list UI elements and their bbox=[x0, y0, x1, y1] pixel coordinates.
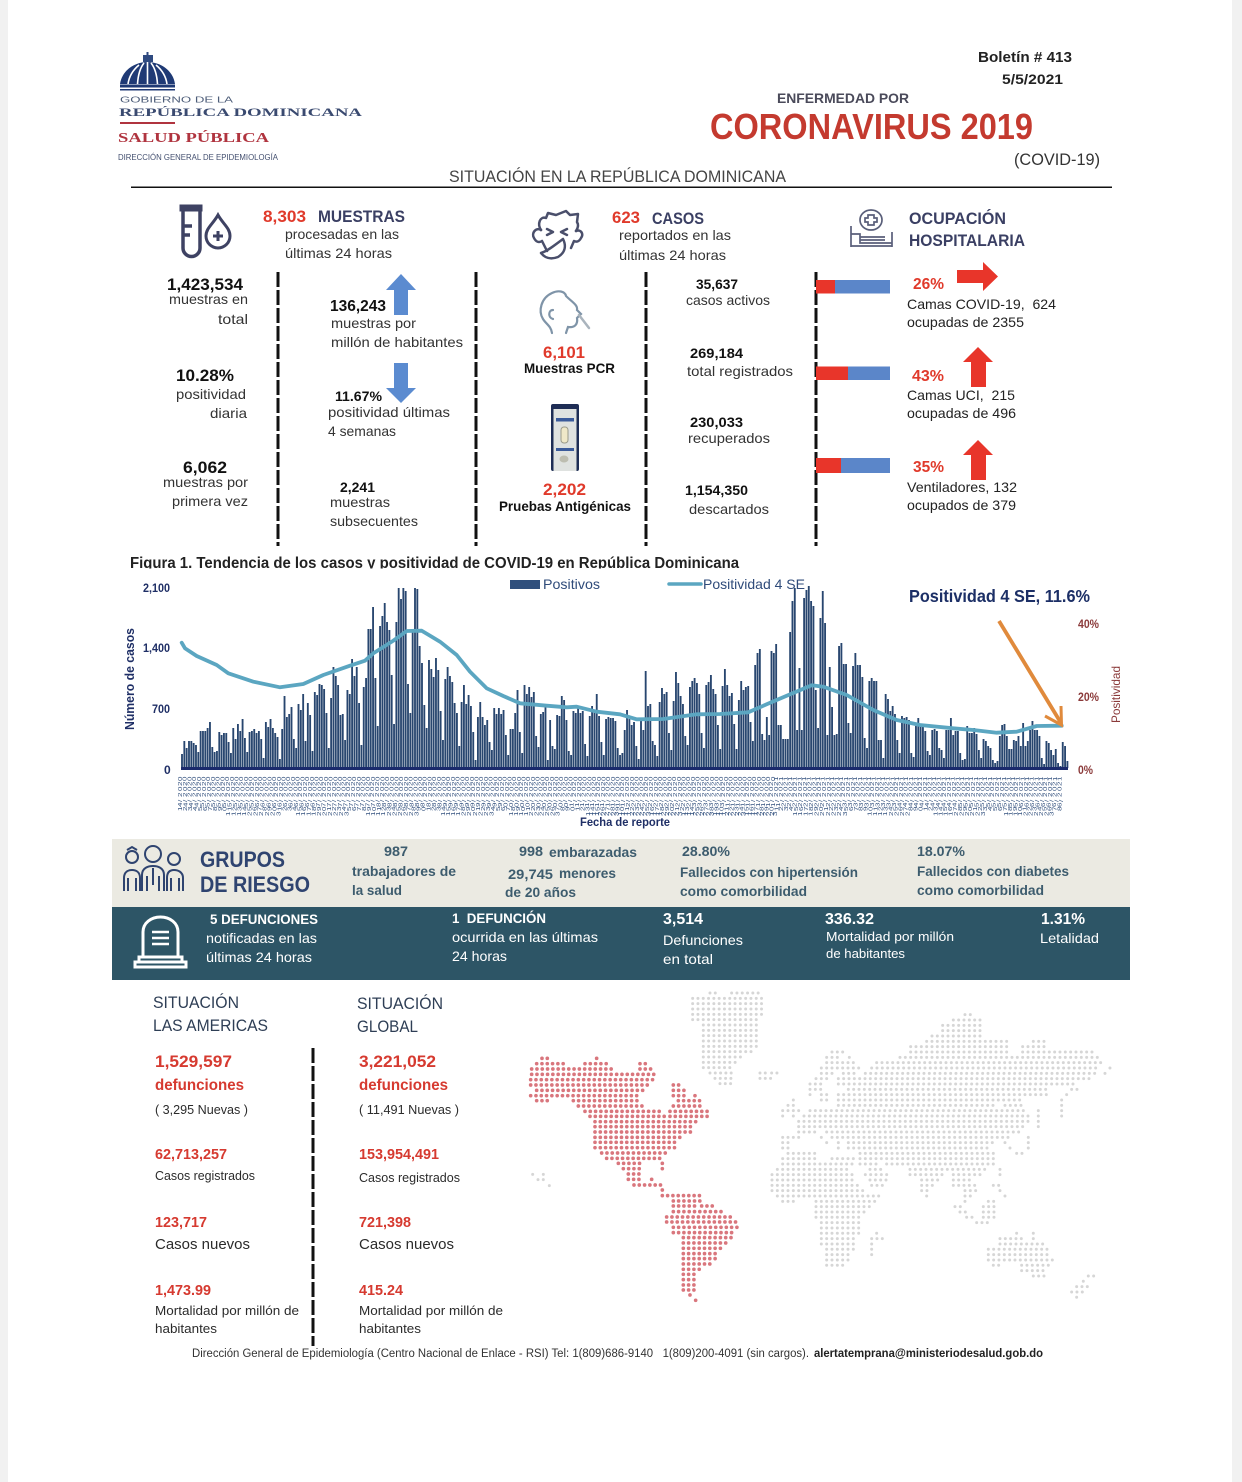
x axis date labels: 1111222223 bbox=[366, 811, 420, 816]
map: Americas in red bbox=[531, 1058, 740, 1300]
icon: test tube and blood drop bbox=[180, 205, 230, 256]
panel: situación Las Américas: ( 3,295 Nuevas ) bbox=[155, 1102, 248, 1117]
panel: defunciones: 336.32 bbox=[825, 911, 874, 928]
panel: defunciones: Letalidad bbox=[1040, 930, 1099, 946]
panel: ocupación details: 26% bbox=[913, 276, 944, 293]
panel: situación Las Américas: 1,529,597 bbox=[155, 1052, 232, 1071]
panel: pruebas antigénicas: Pruebas Antigénicas bbox=[499, 498, 631, 514]
arrow: right bbox=[957, 262, 998, 291]
logo: Gobierno de la República Dominicana, Salud Pública: REPÚBLICA DOMINICANA bbox=[119, 105, 363, 119]
y axis labels: 2,100 bbox=[143, 581, 170, 595]
icon: antigen test cassette bbox=[551, 404, 579, 471]
panel: situación global: Casos registrados bbox=[359, 1170, 460, 1185]
right axis labels bbox=[1078, 617, 1123, 777]
icon: tombstone bbox=[135, 917, 186, 967]
panel: muestras PCR bbox=[524, 343, 615, 376]
x axis date labels bbox=[178, 776, 1065, 816]
panel: defunciones: en total bbox=[663, 951, 713, 967]
panel: situación Las Américas: LAS AMERICAS bbox=[153, 1016, 268, 1035]
x axis date labels: 444455555555556666666666677777777777888888888888999999999990000000000001111111111122222222222233333311111111111222222222223333333333444444444445555555555566666666 bbox=[178, 802, 1063, 807]
panel: ocupación hospitalaria heading bbox=[909, 209, 1025, 250]
panel: ocupación details: ocupadas de 496 bbox=[907, 405, 1016, 421]
bar: camas UCI bbox=[816, 366, 890, 380]
logo: Gobierno de la República Dominicana, Salud Pública: GOBIERNO DE LA bbox=[120, 96, 234, 104]
panel: muestras: primera vez bbox=[172, 493, 248, 509]
panel: grupos de riesgo: 998 bbox=[519, 843, 543, 859]
x axis date labels: 11111111111111111111111111111111111111111111111111111111111111 bbox=[774, 776, 1063, 781]
y axis labels: 700 bbox=[152, 702, 170, 716]
x axis date labels: 11112222 bbox=[868, 811, 911, 816]
panel: situación Las Américas: 62,713,257 bbox=[155, 1147, 227, 1163]
arrow: muestras up bbox=[386, 274, 416, 315]
x axis date labels: 1111222223 bbox=[441, 811, 495, 816]
panel: situación Las Américas bbox=[153, 993, 299, 1336]
panel: situación global: SITUACIÓN bbox=[357, 994, 443, 1013]
arrow: positividad down bbox=[386, 363, 416, 403]
x axis date labels: 0000000000000000000000000000000000000000000000000000000000000000000000000000000000000000000000000000000000000000000000000000000 bbox=[178, 776, 777, 781]
panel: situación global: 3,221,052 bbox=[359, 1052, 436, 1071]
legend: Positividad 4 SE bbox=[703, 576, 805, 592]
panel: muestras: muestras bbox=[330, 494, 390, 510]
panel: situación Las Américas: defunciones bbox=[155, 1077, 244, 1094]
x axis date labels: 1111222223 bbox=[296, 811, 350, 816]
panel: casos totals: 35,637 bbox=[696, 276, 738, 292]
panel: casos totals: descartados bbox=[689, 501, 769, 517]
panel: ocupación details: Camas COVID-19, 624 bbox=[907, 296, 1056, 312]
bulletin number and date: Boletín # 413 bbox=[978, 50, 1072, 66]
panel: situación Las Américas: Casos registrados bbox=[155, 1168, 255, 1183]
panel: defunciones: 1 DEFUNCIÓN bbox=[452, 909, 546, 926]
title bbox=[710, 90, 1100, 169]
panel: casos bbox=[612, 208, 731, 263]
x axis date labels: 1111222223 bbox=[509, 811, 561, 816]
panel: grupos de riesgo: trabajadores de bbox=[352, 863, 456, 879]
panel: muestras: subsecuentes bbox=[330, 513, 418, 529]
y axis labels bbox=[123, 581, 171, 777]
panel: situación global: 415.24 bbox=[359, 1283, 403, 1299]
x axis date labels: 1234567890123456789012345678901234567890123456789012345678901234567890123456789012345678901234567890123456789012345678901234567890123456789012345678901234567890123456789012345678 bbox=[178, 806, 1063, 811]
panel: situación global: 153,954,491 bbox=[359, 1147, 439, 1163]
line: positividad 4 SE bbox=[182, 631, 1062, 733]
icon: person coughing bbox=[533, 211, 582, 258]
logo: Gobierno de la República Dominicana, Salud Pública: SALUD PÚBLICA bbox=[118, 129, 270, 146]
panel: muestras: millón de habitantes bbox=[331, 334, 463, 350]
panel: grupos de riesgo: 28.80% bbox=[682, 843, 731, 859]
bar: ventiladores bbox=[816, 458, 890, 473]
panel: ocupación details: ocupados de 379 bbox=[907, 497, 1016, 513]
panel: defunciones: últimas 24 horas bbox=[206, 949, 312, 965]
panel: muestras: diaria bbox=[210, 405, 247, 421]
panel: casos: 623 bbox=[612, 208, 640, 227]
arrow: up ventiladores bbox=[963, 440, 993, 480]
logo: Gobierno de la República Dominicana, Salud Pública bbox=[118, 52, 363, 162]
panel: situación global: GLOBAL bbox=[357, 1017, 418, 1036]
bars: positivos bbox=[182, 586, 1067, 768]
panel: grupos de riesgo: 29,745 bbox=[508, 866, 553, 882]
panel: casos totals: recuperados bbox=[688, 430, 770, 446]
x axis date labels: 1111222223 bbox=[1004, 811, 1055, 816]
icon: hospital bed bbox=[851, 210, 892, 247]
right axis labels: 0% bbox=[1078, 763, 1093, 777]
panel: ocupación details bbox=[907, 276, 1056, 513]
panel: defunciones: 3,514 bbox=[663, 911, 703, 928]
panel: situación Las Américas: 1,473.99 bbox=[155, 1283, 211, 1299]
panel: casos: últimas 24 horas bbox=[619, 247, 726, 263]
panel: defunciones: Defunciones bbox=[663, 932, 743, 948]
panel: muestras bbox=[163, 207, 463, 529]
dotted world map bbox=[531, 993, 1110, 1300]
panel: grupos de riesgo: de 20 años bbox=[505, 884, 576, 900]
callout: positividad 4 SE 11.6%: Positividad 4 SE, 11.6% bbox=[909, 586, 1090, 606]
panel: situación global: defunciones bbox=[359, 1077, 448, 1094]
panel: ocupación details: 35% bbox=[913, 459, 944, 476]
panel: casos totals: 269,184 bbox=[690, 345, 743, 361]
panel: casos: reportados en las bbox=[619, 227, 731, 243]
panel: muestras: últimas 24 horas bbox=[285, 245, 392, 261]
title: CORONAVIRUS 2019 bbox=[710, 106, 1033, 147]
panel: situación global: Mortalidad por millón de bbox=[359, 1303, 503, 1318]
map: Greenland and Hawaii in grey bbox=[533, 993, 778, 1186]
panel: grupos de riesgo: GRUPOS bbox=[200, 847, 285, 872]
x axis date labels: 2222222222222222222222222222222222222222222222222222222222222222222222222222222222222222222222222222222222222222222222222222222222222222222222222222222222222222222222222222222222222222 bbox=[178, 781, 1063, 786]
footer: alertatemprana@ministeriodesalud.gob.do bbox=[814, 1348, 1043, 1360]
panel: grupos de riesgo: la salud bbox=[352, 882, 402, 898]
panel: defunciones: de habitantes bbox=[826, 946, 905, 961]
map: Europe, Africa, Asia and Oceania in grey bbox=[772, 1015, 1110, 1297]
panel: muestras: 6,062 bbox=[183, 458, 227, 477]
logo: Gobierno de la República Dominicana, Salud Pública: DIRECCIÓN GENERAL DE EPIDEMIOLOGÍA bbox=[118, 152, 278, 162]
panel: muestras: muestras por bbox=[163, 474, 248, 490]
panel: muestras: 1,423,534 bbox=[167, 275, 244, 294]
panel: pruebas antigénicas: 2,202 bbox=[543, 480, 586, 499]
panel: defunciones: 5 DEFUNCIONES bbox=[210, 911, 318, 927]
panel: muestras: total bbox=[218, 311, 248, 327]
panel: muestras: 2,241 bbox=[340, 479, 375, 495]
panel: ocupación details: Ventiladores, 132 bbox=[907, 479, 1017, 495]
panel: muestras PCR: Muestras PCR bbox=[524, 360, 615, 376]
panel: situación global: habitantes bbox=[359, 1321, 422, 1336]
panel: situación Las Américas: 123,717 bbox=[155, 1215, 207, 1231]
panel: defunciones: 24 horas bbox=[452, 948, 507, 964]
panel: situación global: 721,398 bbox=[359, 1215, 411, 1231]
panel: situación Las Américas: SITUACIÓN bbox=[153, 993, 239, 1012]
panel: defunciones: Mortalidad por millón bbox=[826, 929, 954, 944]
x axis date labels: 1111222223 bbox=[933, 811, 987, 816]
panel: casos totals bbox=[685, 276, 793, 517]
chart: tendencia de casos y positividad bbox=[123, 576, 1123, 829]
panel: casos: CASOS bbox=[652, 209, 704, 228]
panel: muestras: 136,243 bbox=[330, 298, 386, 315]
right axis labels: 20% bbox=[1078, 690, 1099, 704]
x axis date labels: 1111222223 bbox=[793, 811, 849, 816]
panel: defunciones: notificadas en las bbox=[206, 930, 317, 946]
panel: grupos de riesgo: embarazadas bbox=[549, 844, 637, 860]
panel: grupos de riesgo: Fallecidos con hipertensión bbox=[680, 864, 858, 880]
x axis line bbox=[181, 767, 1068, 770]
panel: muestras PCR: 6,101 bbox=[543, 343, 585, 362]
x axis date labels: 2222222222222222222222222222222222222222222222222222222222222222222222222222222222222222222222222222222222222222222222222222222222222222222222222222222222222222222222222222222222222222 bbox=[178, 792, 1063, 797]
subtitle: SITUACIÓN EN LA REPÚBLICA DOMINICANA bbox=[449, 167, 787, 186]
right axis labels: 40% bbox=[1078, 617, 1099, 631]
panel: ocupación details: Camas UCI, 215 bbox=[907, 387, 1015, 403]
panel: situación Las Américas: habitantes bbox=[155, 1321, 218, 1336]
x axis date labels: //////////////////////////////////////////////////////////////////////////////////////////////////////////////////////////////////////////////////////////////////////////////////////// bbox=[178, 800, 1065, 802]
panel: grupos de riesgo: menores bbox=[559, 865, 616, 881]
bulletin number and date bbox=[978, 50, 1072, 87]
panel: muestras: muestras por bbox=[331, 315, 416, 331]
panel: grupos de riesgo: 18.07% bbox=[917, 843, 966, 859]
panel: muestras: muestras en bbox=[169, 291, 248, 307]
panel: casos totals: total registrados bbox=[687, 363, 793, 379]
panel: casos totals: casos activos bbox=[686, 292, 770, 308]
panel: situación Las Américas: Mortalidad por millón de bbox=[155, 1303, 299, 1318]
y axis labels: 0 bbox=[164, 763, 171, 777]
panel: muestras: MUESTRAS bbox=[318, 207, 405, 226]
panel: ocupación details: ocupadas de 2355 bbox=[907, 314, 1024, 330]
panel: grupos de riesgo: como comorbilidad bbox=[680, 883, 807, 899]
arrow: up UCI bbox=[963, 347, 993, 387]
right axis labels: Positividad bbox=[1109, 666, 1123, 723]
panel: situación global: Casos nuevos bbox=[359, 1237, 454, 1253]
panel: muestras: positividad bbox=[176, 386, 246, 402]
panel: situación global: ( 11,491 Nuevas ) bbox=[359, 1102, 459, 1117]
panel: muestras: procesadas en las bbox=[285, 226, 399, 242]
panel: casos totals: 230,033 bbox=[690, 414, 743, 430]
panel: situación global bbox=[357, 994, 503, 1336]
panel: ocupación hospitalaria heading: OCUPACIÓN bbox=[909, 209, 1006, 228]
x axis title: Fecha de reporte bbox=[580, 815, 670, 829]
y axis labels: Número de casos bbox=[123, 628, 137, 730]
panel: situación Las Américas: Casos nuevos bbox=[155, 1237, 250, 1253]
panel: defunciones: ocurrida en las últimas bbox=[452, 929, 598, 945]
panel: pruebas antigénicas bbox=[499, 480, 631, 514]
icon: people bbox=[124, 846, 183, 891]
panel: grupos de riesgo bbox=[112, 839, 1130, 907]
icon: nasal swab bbox=[541, 291, 589, 333]
panel: casos totals: 1,154,350 bbox=[685, 482, 748, 498]
x axis date labels: 111122222311112222231111222223111122222311112222231111222223 bbox=[586, 811, 779, 816]
panel: ocupación hospitalaria heading: HOSPITALARIA bbox=[909, 231, 1025, 250]
panel: grupos de riesgo: 987 bbox=[384, 843, 408, 859]
panel: grupos de riesgo: Fallecidos con diabetes bbox=[917, 863, 1069, 879]
bar: camas COVID-19 bbox=[816, 280, 890, 294]
y axis labels: 1,400 bbox=[143, 641, 170, 655]
panel: muestras: 11.67% bbox=[335, 388, 383, 404]
footer: Dirección General de Epidemiología (Centro Nacional de Enlace - RSI) Tel: 1(809)686-9140 1(809)200-4091 (sin cargos). bbox=[192, 1348, 809, 1360]
x axis date labels: 0000000000000000000000000000000000000000000000000000000000000000000000000000000000000000000000000000000000000000000000000000000000000000000000000000000000000000000000000000000000000000 bbox=[178, 786, 1063, 791]
title: ENFERMEDAD POR bbox=[777, 90, 909, 106]
x axis date labels: 1111222223 bbox=[226, 811, 282, 816]
bulletin number and date: 5/5/2021 bbox=[1002, 71, 1063, 87]
arrow: callout bbox=[999, 621, 1062, 725]
panel: grupos de riesgo: DE RIESGO bbox=[200, 872, 310, 897]
panel: ocupación details: 43% bbox=[912, 368, 944, 385]
panel: muestras: 4 semanas bbox=[328, 423, 396, 439]
panel: defunciones bbox=[112, 907, 1130, 980]
panel: muestras: 10.28% bbox=[176, 366, 234, 385]
legend: Positivos bbox=[543, 576, 600, 592]
panel: grupos de riesgo: como comorbilidad bbox=[917, 882, 1044, 898]
panel: muestras: positividad últimas bbox=[328, 404, 450, 420]
title: (COVID-19) bbox=[1014, 150, 1100, 169]
panel: defunciones: 1.31% bbox=[1041, 911, 1085, 928]
panel: muestras: 8,303 bbox=[263, 207, 306, 226]
legend bbox=[510, 576, 805, 592]
